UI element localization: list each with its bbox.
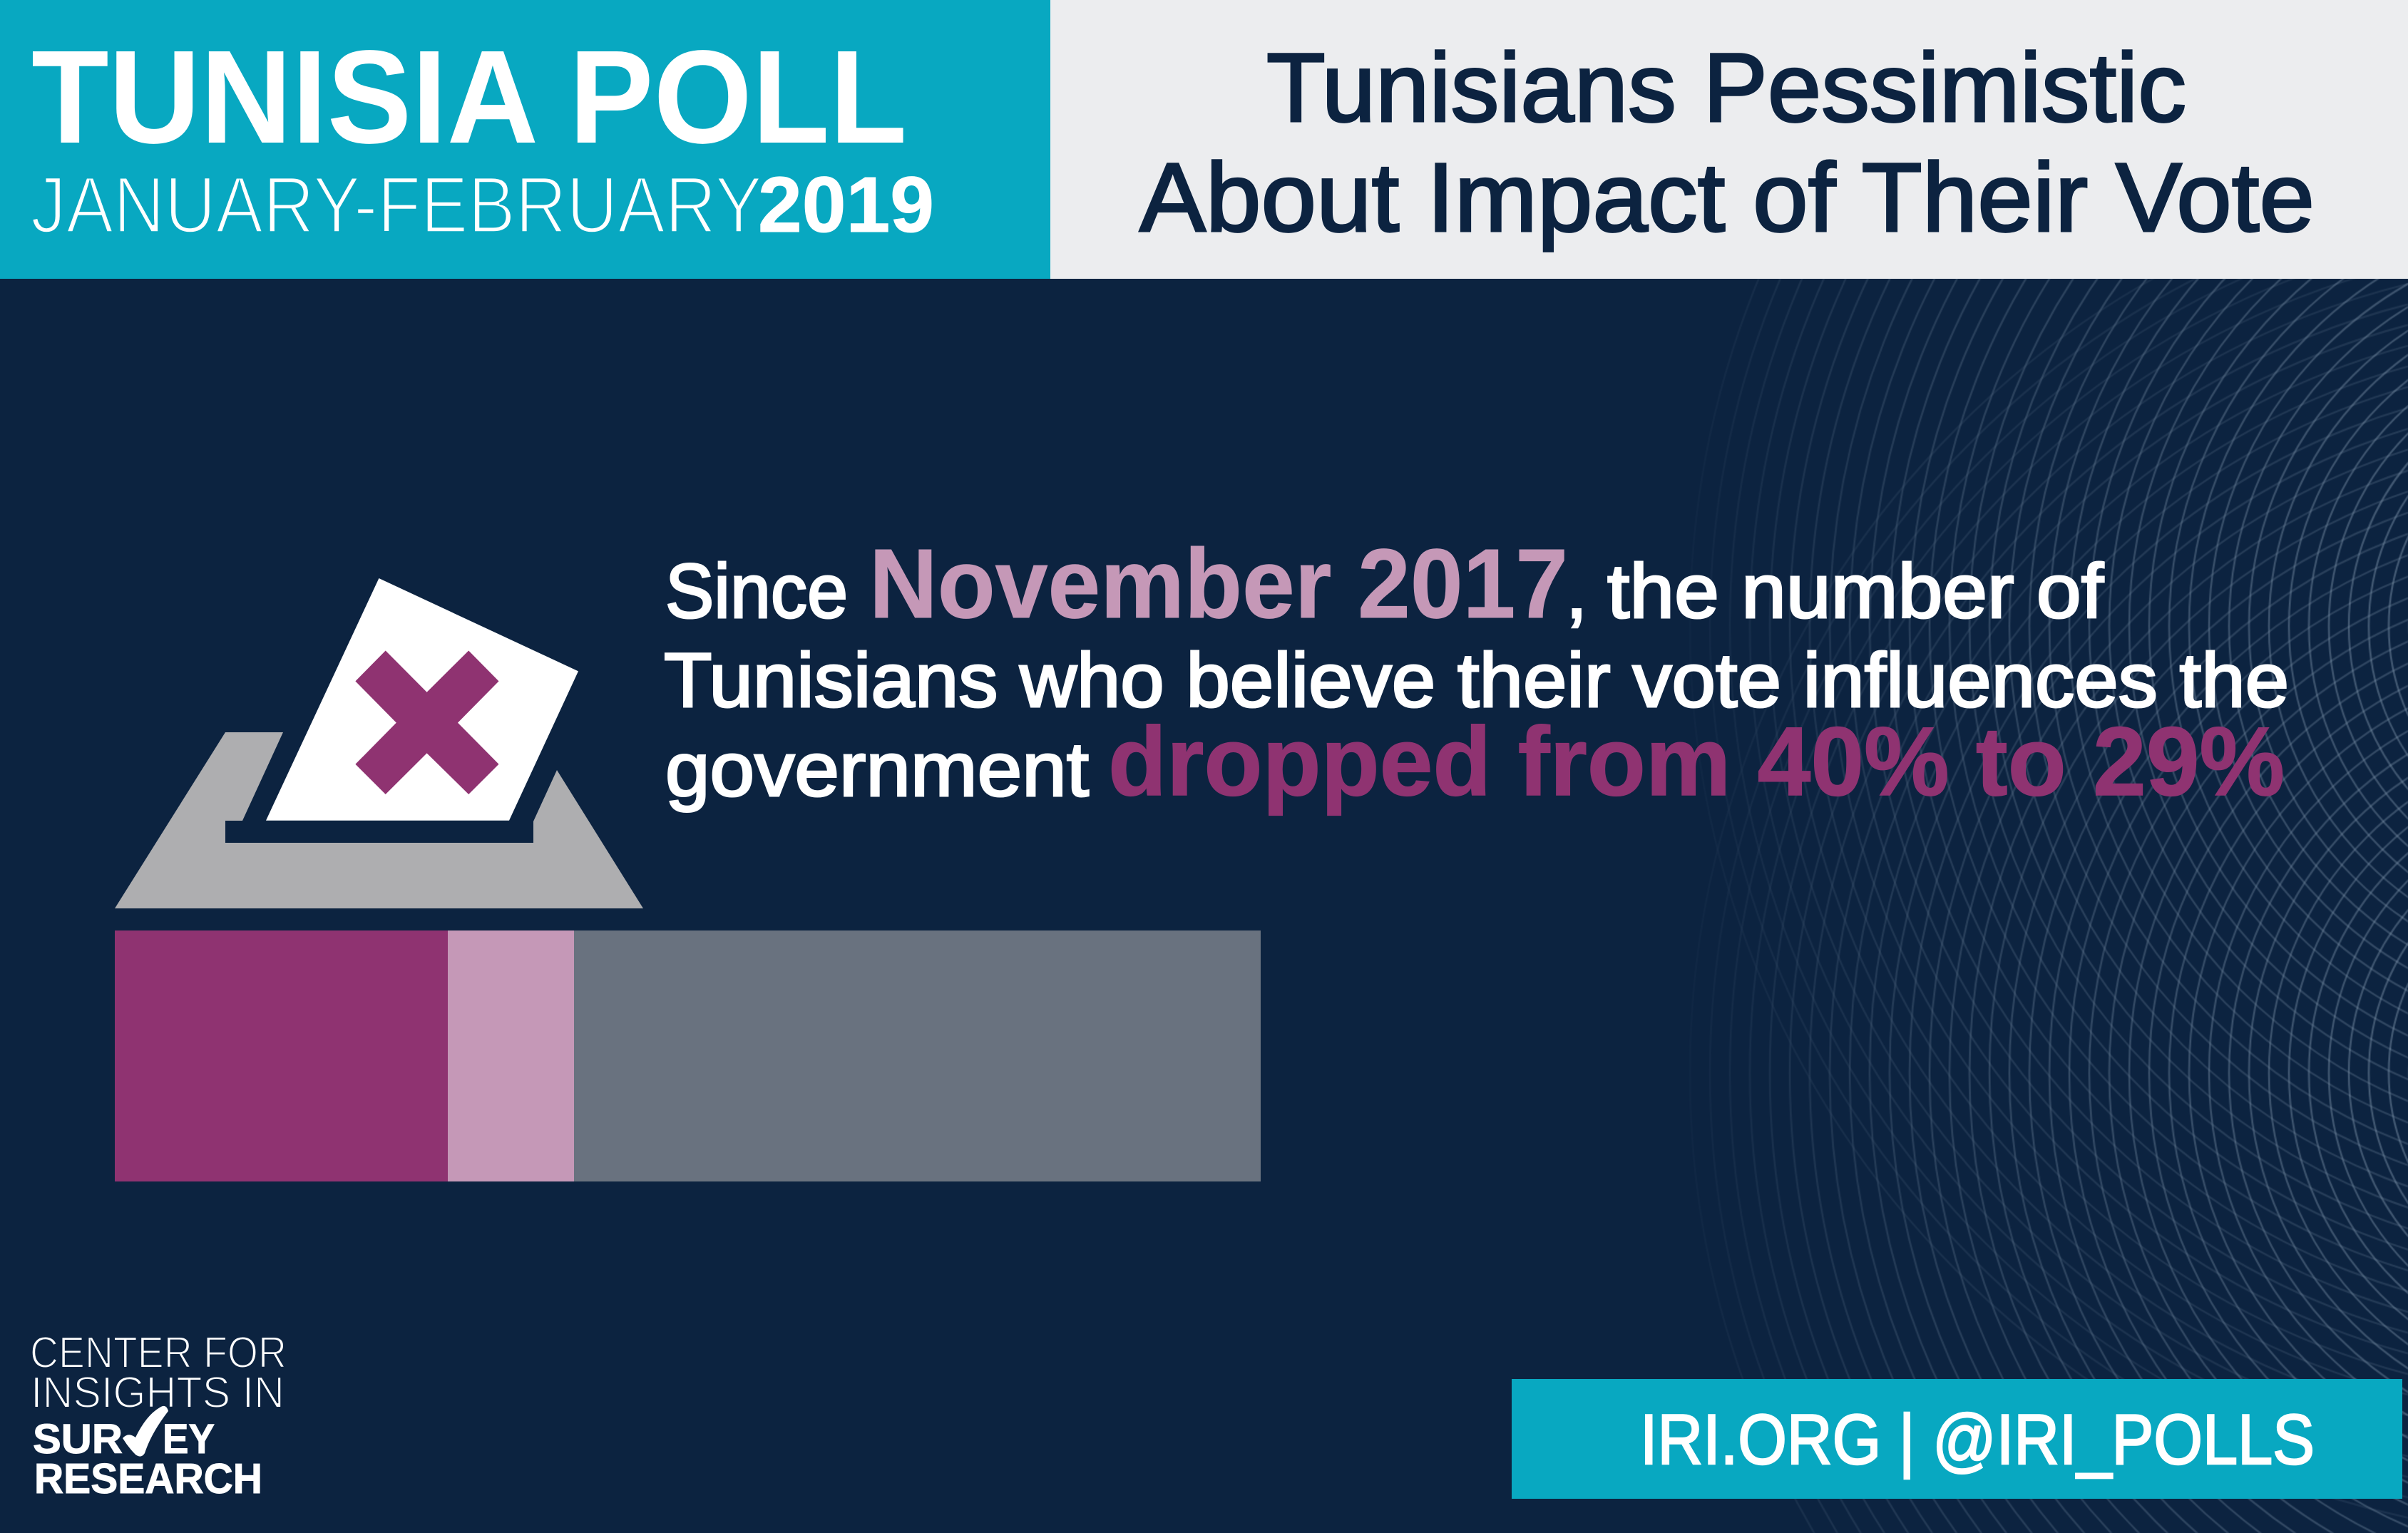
- main statement text: [664, 529, 2289, 816]
- statement line 1: ,: [1566, 548, 1587, 634]
- subheading: poll dates: JANUARY-FEBRUARY: [31, 160, 762, 250]
- statement line 1: November 2017: [869, 529, 1568, 639]
- icon: check mark: [123, 1406, 168, 1457]
- footer callout: website and handle: IRI.ORG | @IRI_POLLS: [1640, 1400, 2315, 1479]
- x mark: [355, 650, 499, 794]
- statement line 1: the number of: [1607, 548, 2104, 634]
- statement line 2: Tunisians who believe their vote influences the: [664, 637, 2289, 723]
- statement line 1: Since: [665, 548, 848, 634]
- bar segment: drop to 40%: [448, 930, 574, 1181]
- footer callout: website and handle: [1512, 1379, 2402, 1499]
- ballot paper: [266, 578, 578, 821]
- background line pattern: [1683, 279, 2408, 1533]
- logo: Center for Insights in Survey Research: INSIGHTS IN: [31, 1368, 285, 1417]
- logo: Center for Insights in Survey Research: RESEARCH: [34, 1455, 262, 1502]
- bar segment: remainder: [574, 930, 1261, 1181]
- icon: ballot box with marked ballot: [115, 578, 643, 908]
- statement line 3: dropped from 40% to 29%: [1108, 707, 2285, 816]
- logo: Center for Insights in Survey Research: CENTER FOR: [30, 1328, 287, 1378]
- logo: Center for Insights in Survey Research: [30, 1328, 287, 1502]
- header panel: headline: [1050, 0, 2408, 279]
- bar segment: 29%: [115, 930, 448, 1181]
- logo: Center for Insights in Survey Research: SUR: [33, 1416, 123, 1462]
- statement line 3: government: [665, 726, 1089, 812]
- heading: Tunisia Poll: TUNISIA POLL: [31, 24, 907, 171]
- ballot box: [115, 732, 643, 908]
- logo: Center for Insights in Survey Research: EY: [163, 1416, 215, 1462]
- subheading: poll dates: 2019: [758, 161, 934, 249]
- stacked bar chart: [115, 930, 1261, 1181]
- headline line 1: Tunisians Pessimistic: [1266, 34, 2186, 143]
- statement line 1: [665, 529, 2104, 639]
- header panel: poll name: [0, 0, 1050, 279]
- headline line 2: About Impact of Their Vote: [1139, 143, 2315, 252]
